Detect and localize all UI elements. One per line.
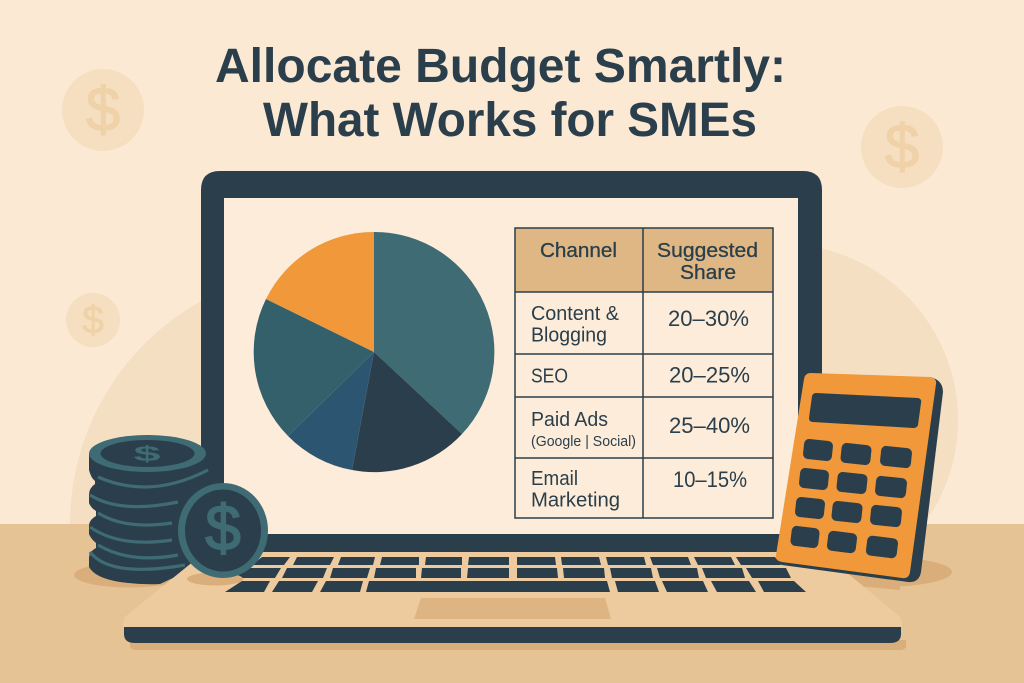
title bbox=[215, 40, 786, 147]
laptop base shadow bbox=[130, 640, 906, 650]
table row: paid ads: Paid Ads bbox=[531, 409, 608, 431]
table row: email marketing: Marketing bbox=[531, 490, 620, 512]
coin stack body bbox=[89, 453, 208, 584]
table row: SEO: 20–25% bbox=[669, 362, 750, 388]
table header text bbox=[540, 239, 758, 284]
calculator shadow on deck bbox=[855, 577, 900, 590]
keyboard bbox=[225, 557, 806, 592]
table row: SEO bbox=[531, 362, 750, 388]
calculator bbox=[776, 373, 943, 590]
calculator body bbox=[776, 373, 936, 578]
table row: email marketing: 10–15% bbox=[673, 467, 747, 492]
title: What Works for SMEs bbox=[263, 94, 757, 147]
decorative coin: top left bbox=[62, 69, 144, 151]
table row: SEO: SEO bbox=[531, 366, 568, 388]
table header text: Suggested bbox=[657, 239, 758, 262]
laptop front lip bbox=[124, 627, 901, 643]
desk bbox=[0, 524, 1024, 683]
calculator display bbox=[809, 393, 921, 428]
table row: content and blogging: Content & bbox=[531, 303, 620, 325]
table row: paid ads bbox=[531, 409, 750, 450]
table grid bbox=[515, 228, 773, 518]
table bbox=[515, 228, 773, 518]
front coin shadow bbox=[187, 572, 243, 586]
background hill bbox=[70, 244, 958, 524]
decorative coin: top left: $ bbox=[86, 76, 120, 145]
coin stack bbox=[89, 435, 208, 584]
top coin bbox=[89, 435, 206, 472]
decorative coin: small left bbox=[66, 293, 120, 347]
decorative coin: top right bbox=[861, 106, 943, 188]
laptop deck bbox=[123, 552, 902, 628]
table row: content and blogging: 20–30% bbox=[668, 306, 749, 331]
table header fill bbox=[515, 228, 773, 292]
desk shadows bbox=[74, 557, 952, 588]
table row: content and blogging bbox=[531, 303, 749, 346]
front coin bbox=[178, 483, 268, 586]
table header text: Share bbox=[680, 261, 736, 284]
title: Allocate Budget Smartly: bbox=[215, 40, 786, 93]
laptop screen bezel bbox=[201, 171, 822, 552]
front coin: $ bbox=[205, 492, 241, 564]
table row: email marketing bbox=[531, 467, 747, 512]
laptop display bbox=[224, 198, 798, 534]
laptop base bbox=[123, 552, 906, 650]
calculator keys bbox=[790, 439, 912, 559]
coin stack: $ bbox=[134, 443, 161, 466]
decorative coin: small left: $ bbox=[82, 299, 104, 342]
table row: paid ads: 25–40% bbox=[669, 413, 750, 438]
laptop screen bbox=[201, 171, 822, 552]
touchpad bbox=[414, 598, 611, 619]
table row: email marketing: Email bbox=[531, 468, 578, 490]
calculator side bbox=[776, 377, 943, 582]
table row: content and blogging: Blogging bbox=[531, 324, 607, 346]
pie chart bbox=[254, 232, 494, 472]
table header text: Channel bbox=[540, 239, 617, 262]
decorative coin: top right: $ bbox=[885, 113, 919, 182]
table row: paid ads: (Google | Social) bbox=[531, 433, 636, 450]
coin stack rims bbox=[90, 470, 208, 569]
